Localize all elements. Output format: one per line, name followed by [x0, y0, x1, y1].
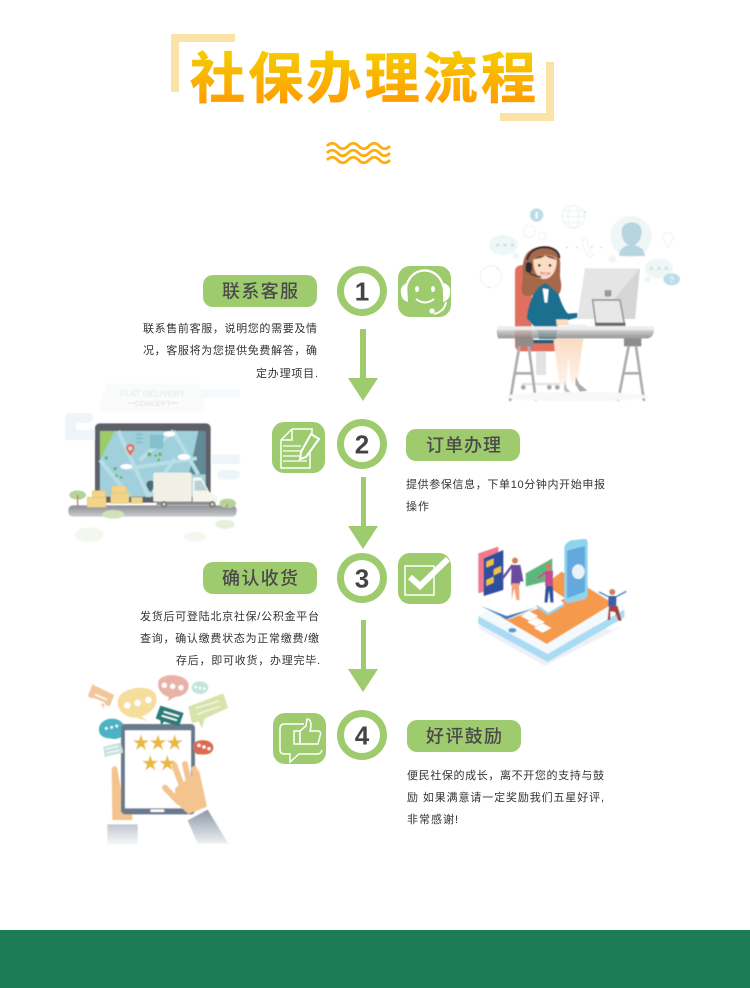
speech bubbles: [88, 675, 228, 739]
step 3 description: 存后，即可收货，办理完毕.: [176, 653, 320, 667]
step 4 description: 便民社保的成长，离不开您的支持与鼓: [407, 768, 604, 782]
step 4: [273, 713, 604, 826]
stars: ★: [142, 753, 159, 773]
icon: headset smile: [398, 266, 451, 317]
monitor: [577, 268, 640, 319]
legs: [553, 338, 583, 385]
step 4 number badge: [340, 714, 384, 756]
figure 1: [512, 558, 518, 564]
step 1 description: 定办理项目.: [256, 366, 318, 380]
step 1 description: 联系售前客服，说明您的需要及情: [143, 321, 317, 335]
step 1 number badge: [340, 270, 384, 312]
stars: [132, 732, 183, 773]
chair: [515, 265, 563, 351]
step 1 description: [143, 321, 318, 380]
sleeves: [107, 824, 138, 844]
step 1: [143, 266, 451, 380]
step 2 heading pill: 订单办理: [426, 436, 501, 456]
footer band: [0, 930, 750, 988]
step 3 number badge: [340, 556, 384, 600]
arrow: step 1 to 2: [348, 329, 378, 401]
stars: ★: [159, 753, 176, 773]
arrow: step 2 to 3: [348, 477, 378, 549]
right hand: [165, 764, 207, 814]
icon: check box: [398, 553, 451, 604]
step 4 description: [407, 768, 604, 826]
tablet: [121, 724, 195, 814]
step 3 heading pill: 确认收货: [222, 568, 298, 588]
step 2: [272, 422, 605, 513]
headset: [527, 247, 559, 260]
step 4 description: 励 如果满意请一定奖励我们五星好评,: [407, 790, 604, 804]
illustration: flat delivery concept: FLAT DELIVERY: [120, 388, 186, 398]
step 2 number badge: 2: [355, 430, 369, 460]
wave decoration: [327, 143, 390, 163]
step 1 description: 况，客服将为您提供免费解答，确: [143, 343, 317, 357]
title bracket: left: [171, 34, 235, 92]
illustration: tablet with star rating: [88, 675, 228, 844]
stars: ★: [149, 732, 167, 752]
step 2 description: 操作: [406, 499, 429, 513]
step 1 heading pill: [203, 275, 317, 307]
stars: ★: [166, 732, 183, 752]
jacket: [527, 283, 577, 339]
step 3 number badge: 3: [355, 564, 369, 594]
title bracket: right: [500, 62, 554, 121]
figure 2: [545, 564, 551, 570]
illustration: flat delivery concept: ━CONCEPT━: [127, 399, 179, 408]
illustration: isometric app platform: [478, 539, 626, 666]
face: [533, 255, 557, 279]
left hand: [112, 766, 132, 820]
step 4 description: 非常感谢!: [407, 812, 458, 826]
step 2 description: [406, 477, 605, 513]
desk: [497, 330, 654, 338]
step 4 heading pill: [407, 720, 521, 752]
arrow: step 3 to 4: [348, 620, 378, 692]
step 2 number badge: [340, 422, 384, 466]
stars: ★: [132, 732, 150, 752]
hair: [521, 246, 561, 296]
step 4 heading pill: 好评鼓励: [426, 726, 502, 746]
illustration: customer service agent: [480, 205, 680, 401]
step 3 description: 查询，确认缴费状态为正常缴费/缴: [140, 631, 319, 645]
icon: thumbs up speech bubble: [273, 713, 326, 764]
step 3 description: 发货后可登陆北京社保/公积金平台: [140, 609, 319, 623]
step 4 number badge: 4: [355, 720, 370, 750]
step 3 description: [140, 609, 320, 667]
step 2 heading pill: [406, 429, 520, 461]
step 1 number badge: 1: [355, 276, 369, 306]
figure 3: [609, 589, 615, 595]
title text: 社保办理流程: [190, 48, 539, 110]
illustration: flat delivery concept: [65, 383, 240, 542]
step 1 heading pill: 联系客服: [222, 282, 298, 302]
illustration: customer service agent: ?: [669, 275, 674, 285]
title: [171, 34, 554, 121]
step 3: [140, 553, 451, 667]
step 2 description: 提供参保信息，下单10分钟内开始申报: [406, 477, 605, 491]
step 3 heading pill: [203, 562, 317, 594]
icon: document and pen: [272, 422, 325, 473]
